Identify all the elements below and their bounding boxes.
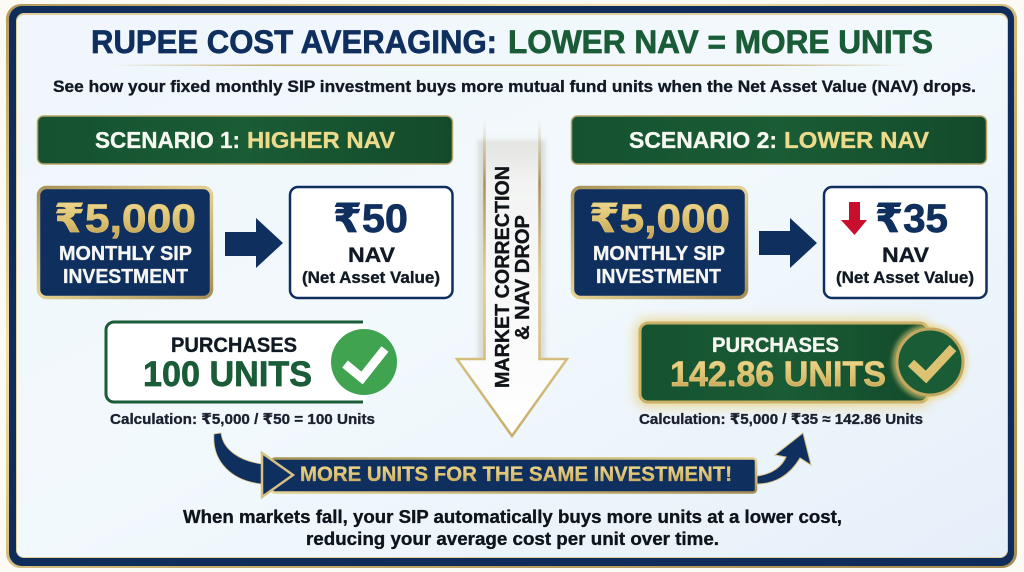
purchases result: PURCHASES [712, 334, 839, 357]
scenario 2 heading: SCENARIO 2: [629, 127, 777, 153]
NAV box: (Net Asset Value) [836, 269, 974, 287]
NAV box: NAV [882, 244, 929, 267]
icon: gold check mark [892, 324, 968, 400]
NAV box: NAV [348, 244, 395, 267]
investment box: ₹5,000 [54, 197, 196, 241]
purchases result: PURCHASES [171, 334, 297, 357]
investment box: ₹5,000 [589, 197, 730, 241]
investment box: INVESTMENT [596, 266, 721, 288]
scenario 1 heading: SCENARIO 1: [95, 127, 240, 153]
title: LOWER NAV = MORE UNITS [508, 24, 933, 60]
investment box: MONTHLY SIP [593, 243, 725, 265]
title [91, 24, 933, 60]
arrow: market correction: MARKET CORRECTION [492, 166, 514, 388]
purchases result: 142.86 UNITS [670, 355, 886, 394]
NAV box [824, 187, 986, 298]
investment box: MONTHLY SIP [59, 243, 192, 265]
purchases result: 100 UNITS [143, 355, 312, 394]
icon: red down arrow [841, 202, 867, 235]
scenario 1 heading: HIGHER NAV [247, 127, 396, 153]
calculation: Calculation: ₹5,000 / ₹50 = 100 Units [110, 411, 375, 428]
scenario 1 heading [38, 116, 452, 164]
closing message: When markets fall, your SIP automatically buys more units at a lower cost, [183, 507, 842, 527]
arrow to NAV [225, 218, 283, 268]
scenario 2 heading: LOWER NAV [784, 127, 930, 153]
title: RUPEE COST AVERAGING: [91, 24, 497, 60]
NAV box: (Net Asset Value) [302, 269, 440, 287]
panel: scenario 1 [38, 116, 452, 428]
subtitle: See how your fixed monthly SIP investment buys more mutual fund units when the Net Asset Value (NAV) drops. [53, 77, 976, 96]
investment box [38, 188, 212, 298]
NAV box: ₹35 [875, 197, 948, 241]
investment box: INVESTMENT [63, 266, 188, 288]
arrow: market correction [456, 120, 567, 438]
banner: more units [214, 433, 811, 497]
calculation: Calculation: ₹5,000 / ₹35 ≈ 142.86 Units [639, 411, 923, 428]
NAV box: ₹50 [333, 197, 408, 241]
arrow: market correction: & NAV DROP [512, 215, 534, 340]
investment box [572, 188, 746, 298]
closing message: reducing your average cost per unit over time. [306, 529, 719, 549]
closing message [183, 507, 842, 549]
curved arrow: right [757, 433, 811, 484]
panel: scenario 2 [572, 116, 986, 428]
icon: check mark [331, 329, 397, 395]
scenario 2 heading [572, 116, 986, 164]
purchases result [106, 322, 397, 402]
purchases result [636, 320, 968, 406]
NAV box [290, 187, 452, 298]
curved arrow: left [214, 433, 262, 484]
banner: more units: MORE UNITS FOR THE SAME INVESTMENT! [300, 463, 732, 486]
arrow to NAV [759, 218, 817, 268]
